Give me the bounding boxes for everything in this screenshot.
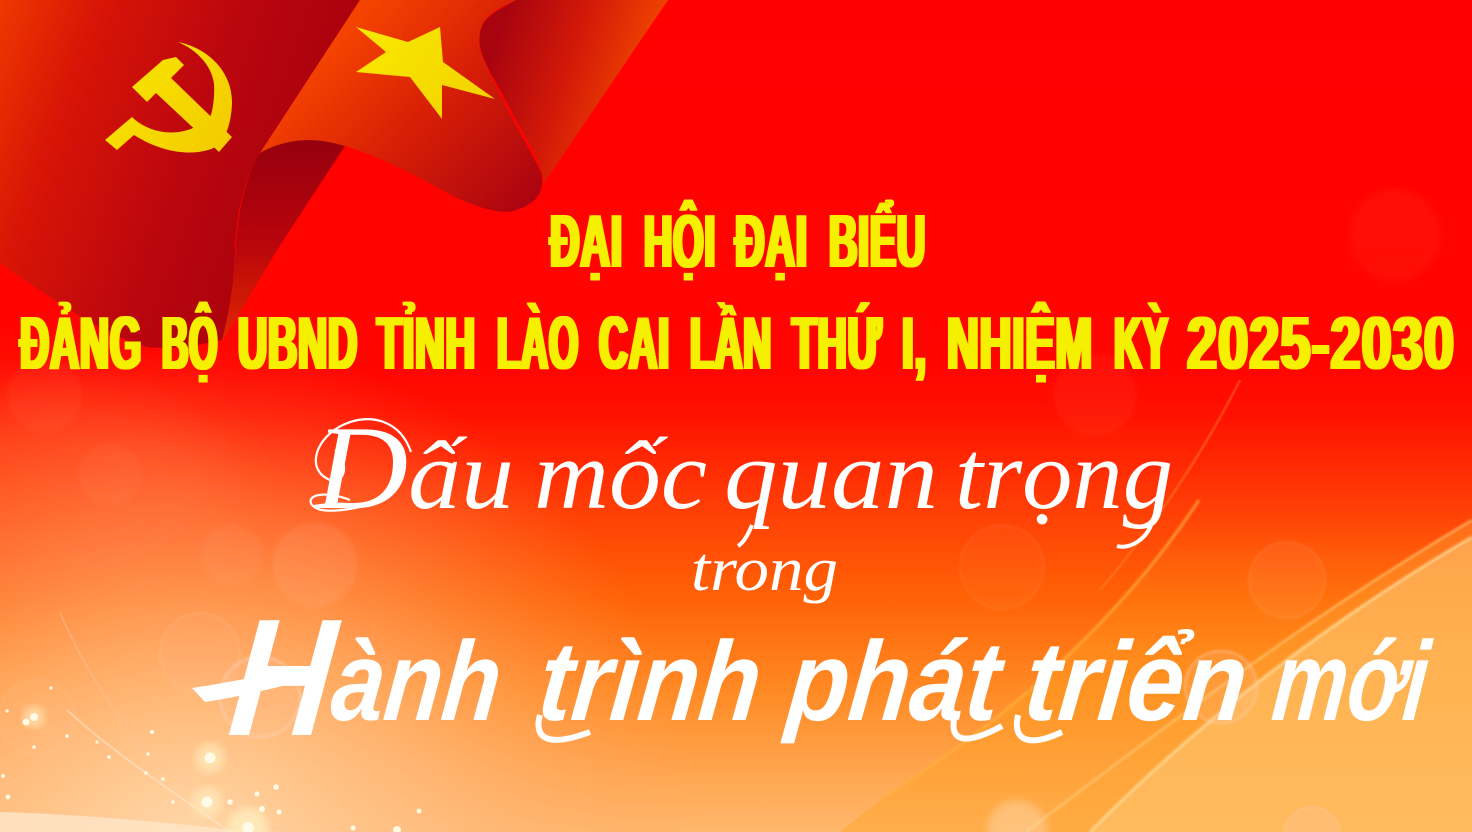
swashes of capital D bbox=[311, 419, 411, 511]
title line 2: LẦN bbox=[690, 301, 772, 385]
title line 2: LÀO bbox=[497, 301, 579, 385]
word: mới: mới bbox=[1267, 619, 1436, 745]
word: triển: triển bbox=[1019, 619, 1254, 745]
title line 1: ĐẠI bbox=[550, 199, 623, 283]
word: phát: phát bbox=[780, 619, 1011, 745]
word: quan: quan bbox=[724, 420, 938, 530]
icon: yellow star bbox=[356, 27, 495, 119]
title line 2 bbox=[20, 301, 1455, 385]
brush stroke of H crossbar bbox=[192, 670, 322, 702]
flag body left bbox=[0, 0, 360, 348]
title line 2: TỈNH bbox=[377, 301, 476, 385]
title line 2: NHIỆM bbox=[947, 301, 1093, 385]
script line: Dấu mốc quan trọng bbox=[311, 402, 1173, 547]
descender tails bbox=[738, 522, 1152, 547]
word: trọng: trọng bbox=[955, 420, 1173, 530]
title line 2: BỘ bbox=[162, 301, 218, 385]
script word: trong: trong bbox=[691, 535, 838, 604]
title line 1 bbox=[550, 199, 926, 283]
title line 2: KỲ bbox=[1114, 301, 1169, 385]
brush tails of letter t bbox=[538, 715, 1062, 740]
title line 2: THỨ bbox=[792, 301, 882, 385]
title line 1: ĐẠI bbox=[735, 199, 808, 283]
title line 1: BIỂU bbox=[829, 199, 926, 283]
word: Hành: ành bbox=[326, 619, 508, 745]
flag middle panel bbox=[260, 0, 542, 212]
word: trình: trình bbox=[533, 619, 768, 745]
title line 2: UBND bbox=[238, 301, 358, 385]
brush line: Hành trình phát triển mới bbox=[192, 584, 1436, 771]
word: Hành: H bbox=[223, 584, 346, 771]
title line 2: I, bbox=[902, 301, 927, 385]
title line 1: HỘI bbox=[644, 199, 716, 283]
title line 2: CAI bbox=[599, 301, 670, 385]
flag: Communist Party flag with hammer and sickle bbox=[0, 0, 668, 348]
flag right panel bbox=[479, 0, 668, 183]
flag fold bbox=[222, 140, 345, 342]
bokeh hexagon lights bbox=[0, 189, 1441, 832]
title line 2: ĐẢNG bbox=[20, 301, 142, 385]
sparkles bbox=[1, 686, 422, 832]
word: mốc: mốc bbox=[534, 420, 707, 530]
decorative golden ribbons bbox=[60, 380, 1472, 832]
word: Dấu: D ấu bbox=[313, 402, 514, 534]
icon: hammer and sickle bbox=[105, 42, 232, 153]
